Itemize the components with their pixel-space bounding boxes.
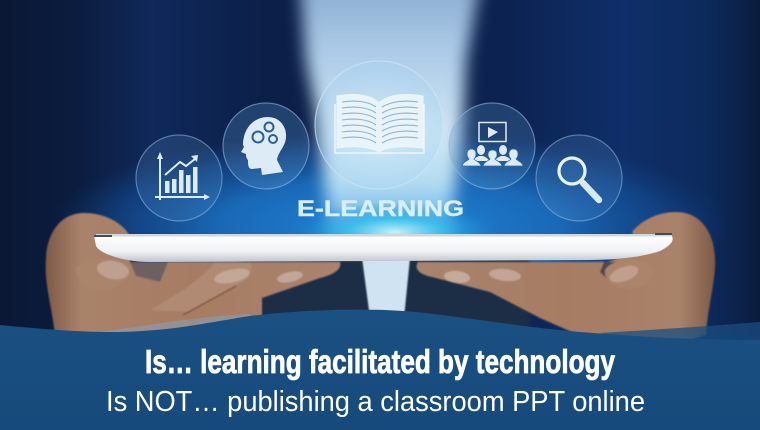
icon: video presentation circle	[449, 103, 535, 189]
bottom wave band	[0, 310, 760, 430]
cyan light above tablet	[290, 202, 500, 262]
icon: open book circle	[315, 61, 443, 189]
shirt	[298, 0, 484, 240]
dark jacket below tablet	[90, 258, 530, 328]
icon: chart circle	[136, 135, 222, 221]
tablet	[94, 233, 673, 262]
right hand	[417, 212, 715, 340]
icon: head with gears circle	[223, 103, 309, 189]
heading: what e-learning is: Is… learning facilitated by technology	[145, 343, 616, 380]
icon: magnifying glass circle	[536, 135, 622, 221]
left hand	[46, 213, 340, 340]
shirt below tablet	[362, 258, 410, 318]
blue glow behind tablet	[50, 130, 730, 320]
subheading: what e-learning is not: Is NOT… publishing a classroom PPT online	[106, 386, 645, 418]
label: E-LEARNING: E-LEARNING	[297, 196, 464, 221]
